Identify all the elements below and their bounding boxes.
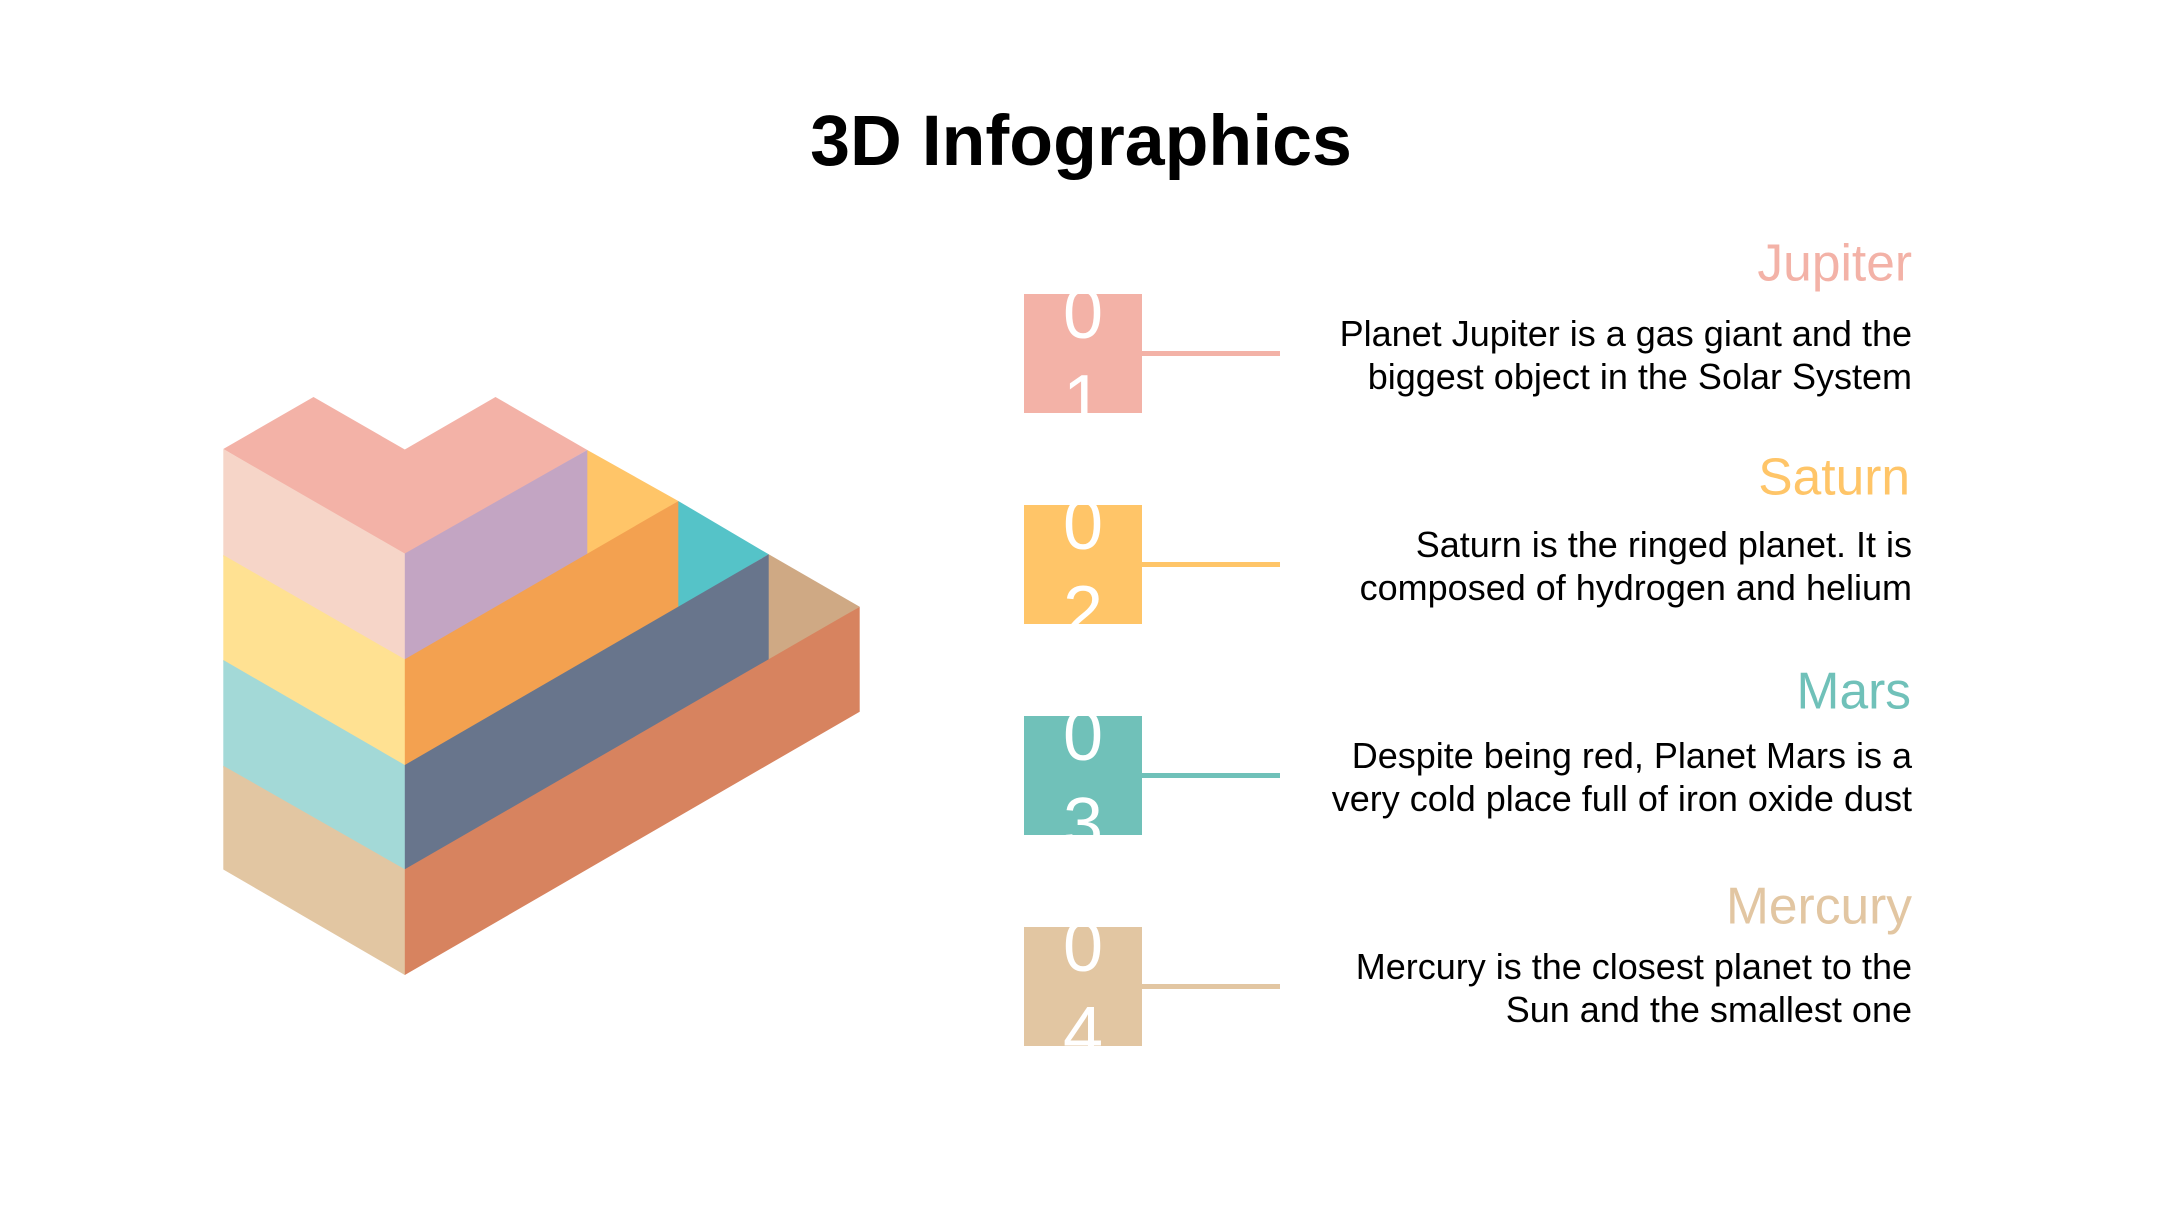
heading Mercury: Mercury bbox=[1726, 876, 1912, 934]
description Saturn: Saturn is the ringed planet. It is bbox=[1416, 524, 1912, 565]
layer 2 top face bbox=[585, 450, 678, 555]
description Saturn bbox=[1360, 524, 1912, 608]
layer 3 right face bbox=[405, 554, 769, 871]
layer 4 top face bbox=[766, 554, 860, 662]
layer 2 left face bbox=[223, 555, 406, 767]
description Mercury bbox=[1356, 946, 1912, 1030]
number badge 04: 0 bbox=[1063, 907, 1103, 987]
description Jupiter: biggest object in the Solar System bbox=[1368, 356, 1912, 397]
layer 3 left face bbox=[223, 660, 406, 871]
description Jupiter bbox=[1340, 313, 1912, 397]
connector line 01 bbox=[1142, 351, 1280, 356]
number badge 01 bbox=[1024, 294, 1142, 413]
description Mercury: Sun and the smallest one bbox=[1506, 989, 1912, 1030]
item 01: Jupiter bbox=[1024, 243, 1912, 413]
layer 4 left face bbox=[223, 766, 406, 975]
heading Jupiter: Jupiter bbox=[1757, 234, 1912, 292]
block top face bbox=[223, 397, 587, 556]
layer 1 right face bbox=[405, 450, 587, 662]
heading Saturn: Saturn bbox=[1758, 448, 1910, 506]
item 03: Mars bbox=[1024, 672, 1912, 835]
connector line 02 bbox=[1142, 562, 1280, 567]
number badge 01: 1 bbox=[1063, 361, 1103, 441]
connector line 03 bbox=[1142, 773, 1280, 778]
description Mars: Despite being red, Planet Mars is a bbox=[1352, 735, 1913, 776]
number badge 03 bbox=[1024, 716, 1142, 835]
item 02: Saturn bbox=[1024, 458, 1911, 624]
description Saturn: composed of hydrogen and helium bbox=[1360, 567, 1912, 608]
number badge 01: 0 bbox=[1063, 274, 1103, 354]
number badge 02: 0 bbox=[1063, 485, 1103, 565]
heading Mars: Mars bbox=[1797, 662, 1911, 720]
description Mars: very cold place full of iron oxide dust bbox=[1332, 778, 1912, 819]
number badge 04: 4 bbox=[1063, 993, 1103, 1073]
title: 3D Infographics bbox=[810, 101, 1352, 181]
number badge 02 bbox=[1024, 505, 1142, 624]
layer 1 left face bbox=[223, 449, 406, 662]
item 04: Mercury bbox=[1024, 888, 1912, 1046]
number badge 02: 2 bbox=[1063, 572, 1103, 652]
connector line 04 bbox=[1142, 984, 1280, 989]
description Jupiter: Planet Jupiter is a gas giant and the bbox=[1340, 313, 1912, 354]
layer 3 top face bbox=[676, 501, 769, 608]
number badge 03: 3 bbox=[1063, 784, 1103, 864]
number badge 03: 0 bbox=[1063, 696, 1103, 776]
isometric stacked block chart bbox=[223, 397, 860, 975]
number badge 04 bbox=[1024, 927, 1142, 1046]
description Mercury: Mercury is the closest planet to the bbox=[1356, 946, 1912, 987]
layer 4 right face bbox=[405, 607, 860, 975]
layer 2 right face bbox=[405, 501, 678, 767]
description Mars bbox=[1332, 735, 1913, 819]
